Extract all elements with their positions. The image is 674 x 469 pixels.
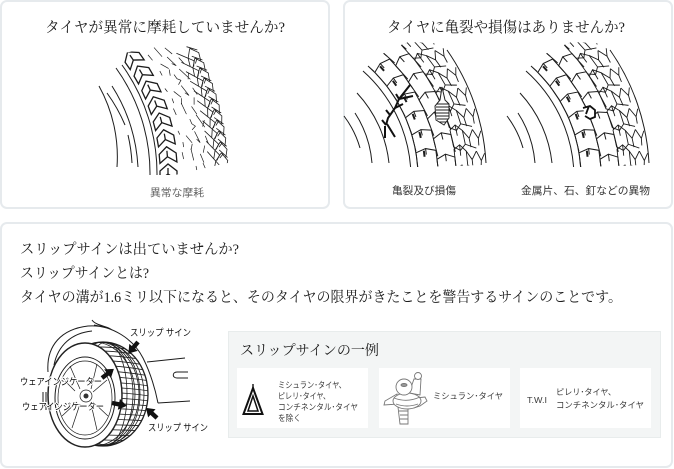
icon: triangle <box>244 384 262 414</box>
card: Michelin mark <box>379 368 510 428</box>
text block: slip sign explanation: スリップサインとは? <box>20 265 149 282</box>
text: excluded tyre brands <box>278 380 358 423</box>
panel: abnormal wear <box>1 1 329 208</box>
label: slip sign bottom: スリップ サイン <box>148 423 208 434</box>
bulge <box>435 87 449 125</box>
panel: slip sign <box>1 223 672 467</box>
crack <box>382 85 413 138</box>
label: wear indicator bottom: ウェアインジケーター <box>22 402 104 413</box>
icon: T.W.I: T.W.I <box>527 395 547 405</box>
arrow: wear indicator bottom <box>111 398 128 411</box>
caption: foreign objects: 金属片、石、釘などの異物 <box>521 184 650 197</box>
heading: cracks and damage question: タイヤに亀裂や損傷はありませんか? <box>387 18 625 36</box>
illustration: worn tyre tread <box>99 38 228 180</box>
text block: slip sign explanation: スリップサインは出ていませんか? <box>20 241 239 258</box>
arrow: slip sign top <box>124 338 142 357</box>
panel: cracks and damage <box>344 1 672 208</box>
illustration: tyre with foreign object <box>507 7 649 198</box>
caption: cracks and damage: 亀裂及び損傷 <box>392 184 457 197</box>
text: excluded tyre brands: ミシュラン･タイヤ、 <box>278 380 346 390</box>
text block: slip sign explanation <box>20 241 622 306</box>
text: Pirelli and Continental tyres: コンチネンタル･タイヤ <box>556 400 644 410</box>
text: Pirelli and Continental tyres: ピレリ･タイヤ、 <box>556 387 616 397</box>
heading: slip sign example: スリップサインの一例 <box>240 343 379 359</box>
arrow: wear indicator top <box>99 364 117 382</box>
illustration: tyre with crack and bulge <box>344 7 486 198</box>
wheel arch and car body <box>43 320 190 410</box>
heading: abnormal wear question: タイヤが異常に摩耗していませんか? <box>45 18 285 36</box>
text block: slip sign explanation: タイヤの溝が1.6ミリ以下になると、そのタイヤの限界がきたことを警告するサインのことです。 <box>20 288 622 306</box>
text: Pirelli and Continental tyres <box>556 387 644 410</box>
diagram: tyre with slip sign and wear indicator <box>20 320 208 447</box>
caption: abnormal wear: 異常な摩耗 <box>150 186 205 199</box>
text: excluded tyre brands: ピレリ･タイヤ、 <box>278 391 330 401</box>
arrow: slip sign bottom <box>142 404 161 422</box>
text: excluded tyre brands: を除く <box>278 413 301 423</box>
label: slip sign top: スリップ サイン <box>130 328 191 339</box>
text: Michelin tyre: ミシュラン･タイヤ <box>433 391 503 401</box>
panel: slip sign examples <box>228 332 660 438</box>
label: wear indicator top: ウェアインジケーター <box>20 377 102 388</box>
tyre sidewall and wheel <box>48 343 122 447</box>
card: T.W.I mark <box>520 368 651 428</box>
text: excluded tyre brands: コンチネンタル･タイヤ <box>278 402 358 412</box>
foreign object <box>583 106 595 119</box>
icon: Michelin figure <box>384 372 427 424</box>
tyre tread <box>92 341 149 447</box>
card: triangle mark <box>237 368 368 428</box>
